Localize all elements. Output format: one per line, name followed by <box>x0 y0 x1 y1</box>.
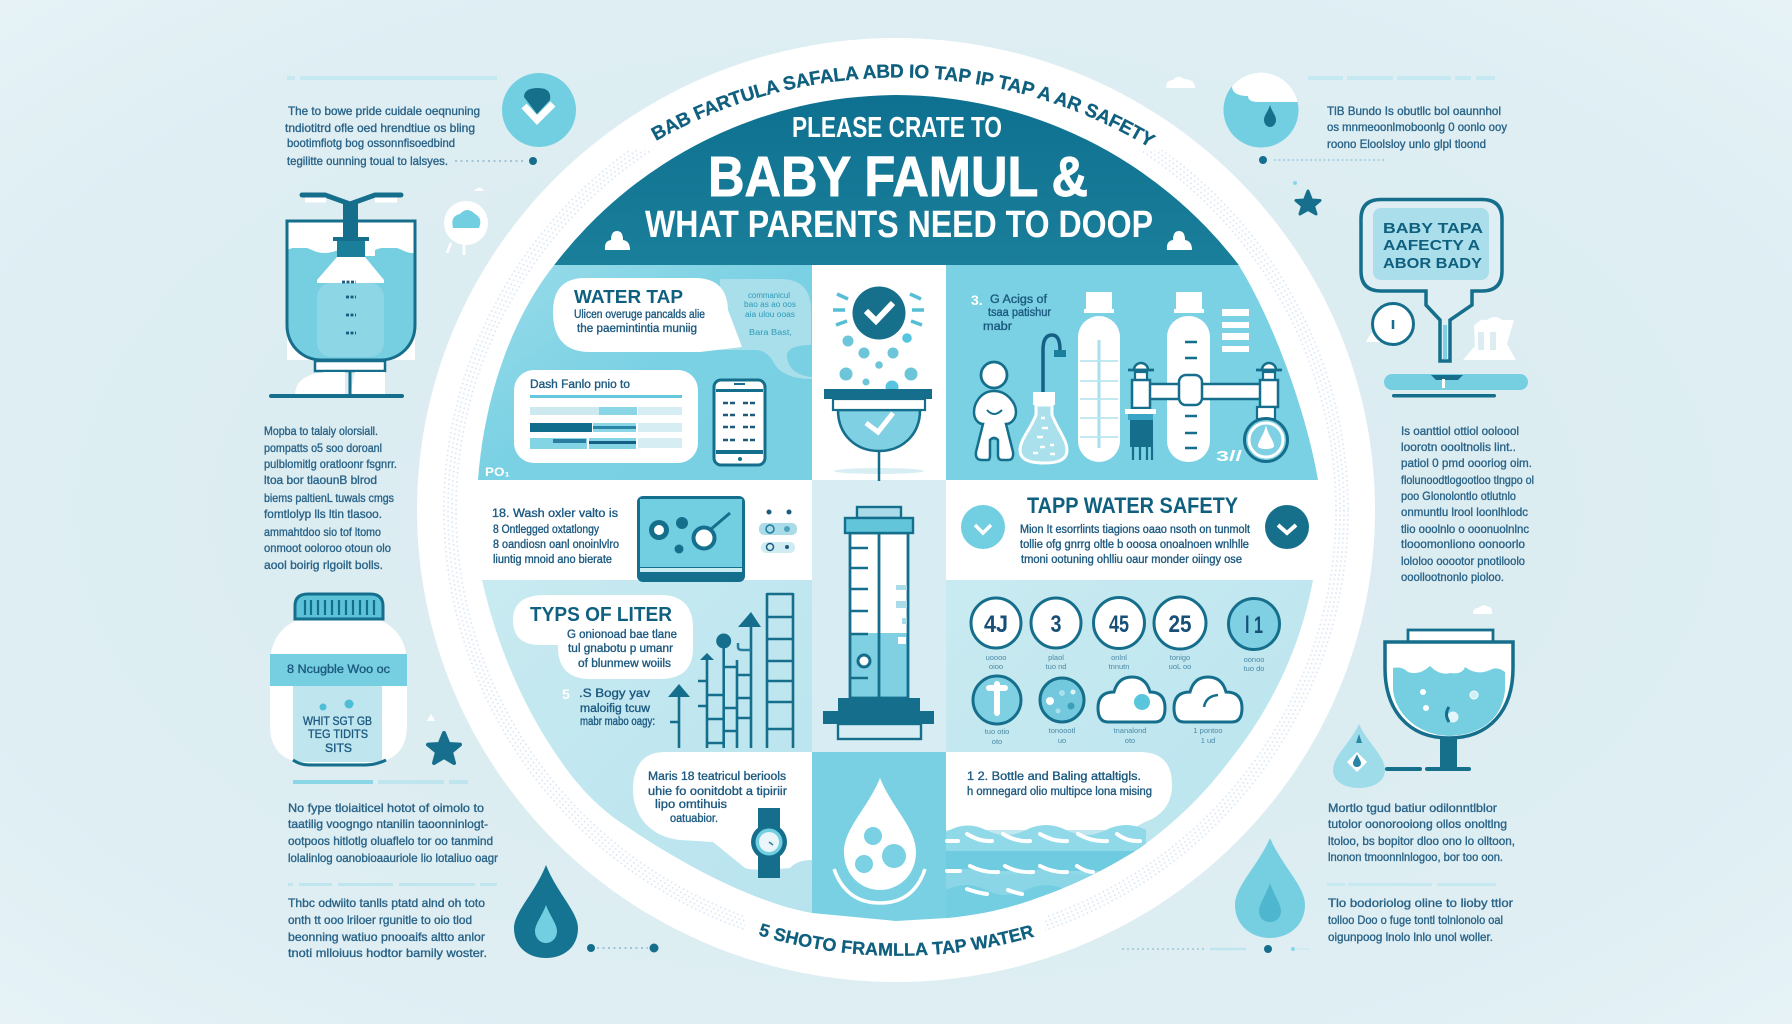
icon: pill bottle: 8 Ncugble Woo oc <box>287 664 390 676</box>
icon: big light drop <box>1235 838 1305 938</box>
icon: tiny dot <box>1293 181 1297 185</box>
decorative rule: top left <box>287 76 497 80</box>
panel: bottles background <box>946 265 1330 480</box>
icon row: pin, mottled, clouds: uo <box>1058 736 1066 745</box>
icon: white trees <box>1463 317 1516 360</box>
icon: top left check badge <box>502 73 576 147</box>
text: lower left note one <box>288 801 498 865</box>
text: top right note: os mnmeoonlmoboonlg 0 oonlo ooy <box>1327 120 1507 134</box>
icon: measuring bottle two <box>1167 292 1210 462</box>
number badges: 45 <box>1109 611 1129 638</box>
text: right mid note: tlio ooolnlo o ooonuolnlnc <box>1401 522 1529 536</box>
text: lower left note two: tnoti mlloiuus hodtor bamily woster. <box>288 946 487 960</box>
chart: ladder bars <box>668 593 793 748</box>
heading block: WHAT PARENTS NEED TO DOOP <box>645 204 1153 246</box>
connector: bottom left dots <box>587 944 658 952</box>
number badges: onlnl <box>1111 653 1127 662</box>
panel: table card: Dash Fanlo pnio to <box>530 379 630 391</box>
label: PO: PO₁ <box>485 465 510 479</box>
text: left mid note: aool boirig rlgoilt bolls. <box>264 558 383 572</box>
icon: right lock cloud <box>1167 231 1192 250</box>
text: lower right note one: ltoloo, bs bopitor dloo ono lo olltoon, <box>1328 834 1515 848</box>
icon row: pin, mottled, clouds: oto <box>992 737 1002 746</box>
number badges: 3 <box>1050 611 1062 638</box>
icon: dark star right <box>1296 191 1320 214</box>
curved title text on ring: BAB FARTULA SAFALA ABD IO TAP IP TAP A AR SAFETY <box>650 64 1156 146</box>
callout: left lower bubble: uhie fo oonitdobt a tipiriir <box>648 786 787 798</box>
icon: stripes <box>1222 309 1249 352</box>
panel: table card <box>514 370 698 463</box>
icon row: pin, mottled, clouds: 1 ud <box>1201 736 1215 745</box>
icon: small white cloud right <box>1473 605 1492 614</box>
icon: person <box>974 362 1016 460</box>
text: right mid note: Is oanttiol ottiol ooloool <box>1401 424 1519 438</box>
icon row: pin, mottled, clouds: tonoootl <box>1049 726 1076 735</box>
text: right mid note: flolunoodtlogootloo tlngpo ol <box>1401 473 1534 487</box>
icon: pill bottle: SITS <box>325 743 352 755</box>
heading: tapp water safety: TAPP WATER SAFETY <box>1027 493 1238 518</box>
icon: right chevron badge <box>1265 505 1309 549</box>
panel: numbers background <box>946 580 1313 888</box>
decorative rule: under pill bottle <box>293 780 373 784</box>
text: top left note: tndiotitrd ofle oed hrendtiue os bling <box>285 121 475 135</box>
text: wash note: 18. Wash oxler valto is <box>492 508 618 520</box>
number badges: tuo do <box>1244 664 1264 673</box>
panel: title banner <box>554 95 1238 265</box>
text: lower left note two <box>288 896 487 960</box>
white circular ring <box>417 38 1375 982</box>
icon: small chips <box>759 510 797 553</box>
icon: safety sign: ABOR BADY <box>1383 255 1482 272</box>
text: lower right note two: oigunpoog lnolo lnlo unol woller. <box>1328 930 1493 944</box>
callout: light side bubble: aia ulou ooas <box>745 310 795 319</box>
icon row: pin, mottled, clouds: oto <box>1125 736 1135 745</box>
dotted ring texture <box>443 150 1349 931</box>
text: safety note: tollie ofg gnrrg oltle b ooosa onoalnoen wnlhlle <box>1020 539 1249 551</box>
icon: tiny white drop <box>427 714 435 721</box>
text: lower left note two: beonning watiuo pnooaifs altto anlor <box>288 930 485 944</box>
icon: light drop with diamond <box>1333 724 1385 788</box>
text: lower left note one: ootpoos hitlotlg oluaflelo tor oo tanmind <box>288 834 493 848</box>
callout: light side bubble: commanicul <box>748 291 790 300</box>
connector: bottom right dots <box>1122 945 1310 953</box>
icon: left lock cloud <box>605 231 630 250</box>
infographic canvas <box>264 38 1534 982</box>
text: right mid note: tlooomonliono oonoorlo <box>1401 537 1525 551</box>
text: lower right note two: tolloo Doo o fuge tontl tolnlonolo oal <box>1328 913 1503 927</box>
text: top left note: bootimfiotg bog ossonnfisoedbind <box>287 136 455 150</box>
panel: cylinder background <box>812 480 946 752</box>
text: left mid note <box>264 424 397 572</box>
icon: left chevron badge <box>961 505 1005 549</box>
icon: small cloud badge <box>444 188 488 255</box>
text: left mid note: biems paltienL tuwals cmgs <box>264 491 394 505</box>
icon: measuring bottle one <box>1078 292 1120 462</box>
icon row: pin, mottled, clouds: 1 pontoo <box>1193 726 1223 735</box>
number badges: tuo nd <box>1046 662 1066 671</box>
text: left mid note: fomtlolyp lls ltin tlasoo. <box>264 507 382 521</box>
callout: left lower bubble: lipo omtihuis <box>655 799 727 811</box>
text: top right note <box>1327 104 1507 151</box>
text: lower right note one: lnonon tmoonnlnlogoo, bor too oon. <box>1328 850 1503 864</box>
icon: safety sign <box>1361 200 1502 361</box>
icon: sign base <box>1384 374 1528 398</box>
number badges: plaol <box>1048 653 1064 662</box>
callout: left lower bubble: Maris 18 teatricul beriools <box>648 771 786 783</box>
icon row: pin, mottled, clouds: tuo otio <box>985 727 1009 736</box>
number badges <box>971 597 1280 673</box>
text: wash note: liuntig mnoid ano bierate <box>493 554 612 566</box>
text: bottle note: 3. <box>971 292 983 308</box>
number badges: tonigo <box>1170 653 1190 662</box>
heading block: BABY FAMUL & <box>708 145 1088 209</box>
text: top left note: The to bowe pride cuidale oeqnuning <box>288 104 480 118</box>
panel: right note bubble <box>946 752 1172 830</box>
text: right mid note: onmuntlu lrool loonlhlodc <box>1401 505 1528 519</box>
text: lower right note two <box>1328 896 1513 944</box>
text: right lower bubble: h omnegard olio multipce lona mising <box>967 786 1152 798</box>
text: step note: 5 <box>562 686 570 702</box>
decorative rule: top right <box>1308 76 1495 80</box>
icon: safety sign: AAFECTY A <box>1383 237 1480 254</box>
icon: gauge ring <box>1366 304 1414 344</box>
callout: types of liter: tul gnabotu p umanr <box>568 643 673 655</box>
text: wash note: 8 Ontlegged oxtatlongy <box>493 524 599 536</box>
number badges: oonoo <box>1244 655 1264 664</box>
connector: top right dots <box>1259 156 1385 164</box>
text: wash note <box>492 508 619 566</box>
icon: safety sign: BABY TAPA <box>1383 220 1483 237</box>
icon row: pin, mottled, clouds: tnanalond <box>1114 726 1146 735</box>
text: left mid note: onmoot ooloroo otoun olo <box>264 541 391 555</box>
callout: light side bubble: bao as ao oos <box>744 300 796 309</box>
text: lower left note one: No fype tloiaiticel hotot of oimolo to <box>288 801 484 815</box>
icon: pipe with filter and bulb <box>1125 363 1288 462</box>
text: left mid note: ammahtdoo sio tof ltomo <box>264 525 381 539</box>
text: right mid note: loorotn oooltnolis lint.. <box>1401 440 1516 454</box>
text: right mid note: poo Glonolontlo otlutnlo <box>1401 489 1516 503</box>
text: right mid note <box>1401 424 1534 584</box>
text: step note: .S Bogy yav <box>579 688 650 700</box>
callout: types of liter: of blunmew woiils <box>578 658 671 670</box>
icon: check badge with rays <box>833 286 924 340</box>
curved footer text on ring: 5 SHOTO FRAMLLA TAP WATER <box>759 923 1035 956</box>
text: safety note: tmoni ootuning ohlliu oaur monder oiingy ose <box>1021 554 1242 566</box>
text: lower right note one: tutolor oonorooiong ollos onoltlng <box>1328 817 1507 831</box>
text: right mid note: lololoo ooootor pnotiloolo <box>1401 554 1525 568</box>
text: left mid note: ltoa bor tlaounB blrod <box>264 473 377 487</box>
text: lower right note one: Mortlo tgud batiur odilonntlblor <box>1328 801 1497 815</box>
text: top left note <box>285 104 480 168</box>
icon: top right cloud drop badge <box>1224 70 1298 148</box>
text: lower right note two: Tlo bodoriolog oline to lioby ttlor <box>1328 896 1513 910</box>
text: safety note: Mion It esorrlints tiagions oaao nsoth on tunmolt <box>1020 524 1251 536</box>
text: right lower bubble: 1 2. Bottle and Baling attaltigls. <box>967 771 1141 783</box>
callout: water tap: WATER TAP <box>574 287 683 307</box>
callout: water tap: Ulicen overuge pancalds alie <box>574 309 705 321</box>
icon: pill bottle: WHIT SGT GB <box>303 716 372 728</box>
icon: tap and flask <box>1020 335 1067 463</box>
panel: types of liter background <box>470 580 812 930</box>
text: bottle note: tsaa patishur <box>988 307 1051 319</box>
text: lower left note one: taatilig voogngo ntanilin taoonninlogt- <box>288 817 488 831</box>
number badges: uoooo <box>986 653 1006 662</box>
panel: water tap background <box>470 265 812 480</box>
number badges: oioo <box>989 662 1003 671</box>
text: wash note: 8 oandiosn oanl onoinlvlro <box>493 539 619 551</box>
number badges: l 1 <box>1245 612 1263 639</box>
text: right lower bubble <box>967 771 1152 798</box>
icon: water jar with bottle <box>271 195 420 396</box>
text: bottle note: G Acigs of <box>990 294 1048 306</box>
text: bottle note: mabr <box>983 321 1012 333</box>
text: step note: mabr mabo oagy: <box>580 716 655 728</box>
callout: light side bubble: Bara Bast, <box>749 328 792 337</box>
text: right mid note: patiol 0 pmd oooriog oim. <box>1401 456 1532 470</box>
text: lower right note one <box>1328 801 1515 864</box>
callout: types of liter: TYPS OF LITER <box>530 604 673 626</box>
icon: watch <box>751 808 787 878</box>
connector: top left dots <box>455 157 537 165</box>
number badges: uoL oo <box>1169 662 1191 671</box>
label: 3 percent: 3// <box>1216 448 1243 465</box>
callout: water tap: the paemintintia muniig <box>577 323 697 335</box>
icon: monitor <box>637 496 745 582</box>
panel: check funnel background <box>812 265 946 480</box>
text: top right note: roono Eloolsloy unlo glpl tloond <box>1327 137 1486 151</box>
icon: water drop with bubbles <box>834 778 925 903</box>
text: right mid note: ooollootnonlo pioloo. <box>1401 570 1504 584</box>
icon: dark star left <box>428 733 460 763</box>
icon: goblet of water <box>1385 630 1513 771</box>
text: bottle note <box>971 292 1051 333</box>
heading block: PLEASE CRATE TO <box>792 112 1002 144</box>
icon: funnel with check <box>824 389 932 481</box>
falling water drops <box>840 333 918 394</box>
decorative rule: lower right <box>1327 883 1496 886</box>
text: left mid note: Mopba to talaiy olorsiall. <box>264 424 378 438</box>
callout: water tap <box>553 278 742 352</box>
text: left mid note: pompatts o5 soo doroanl <box>264 441 382 455</box>
text: safety note <box>1020 524 1251 566</box>
waves <box>945 825 1146 918</box>
text: lower left note two: onth tt ooo lriloer rgunitle to oio tlod <box>288 913 472 927</box>
callout: types of liter <box>513 595 693 679</box>
text: left mid note: pulblomitlg oratloonr fsgnrr. <box>264 457 397 471</box>
icon: dark drop <box>514 865 578 958</box>
callout: types of liter: G onionoad bae tlane <box>567 629 677 641</box>
icon: pill bottle: TEG TIDITS <box>308 729 368 741</box>
decorative rule: lower left <box>288 780 497 886</box>
text: top left note: tegilitte ounning toual to lalsyes. <box>287 154 448 168</box>
icon: small white cloud <box>1166 77 1195 88</box>
callout: left lower bubble <box>633 752 812 870</box>
text: top right note: TlB Bundo Is obutllc bol oaunnhol <box>1327 104 1501 118</box>
number badges: 4J <box>984 611 1008 638</box>
panel: drop background <box>812 752 946 927</box>
number badges: 25 <box>1168 611 1192 638</box>
callout: left lower bubble: oatuabior. <box>670 813 718 825</box>
text: step note: maloifig tcuw <box>580 703 651 715</box>
icon: phone <box>714 380 765 465</box>
icon row: pin, mottled, clouds <box>973 676 1242 746</box>
text: lower left note two: Thbc odwiito tanlls ptatd alnd oh toto <box>288 896 485 910</box>
callout: light side bubble <box>720 279 812 379</box>
icon: pill bottle <box>270 594 407 765</box>
heading block <box>645 112 1153 246</box>
central circle panels <box>470 90 1330 930</box>
number badges: tnnutn <box>1109 662 1129 671</box>
text: lower left note one: lolalinlog oanobioaauriole lio lotaliuo oagr <box>288 851 498 865</box>
icon: graduated cylinder <box>823 507 934 739</box>
text: step note <box>562 686 655 728</box>
